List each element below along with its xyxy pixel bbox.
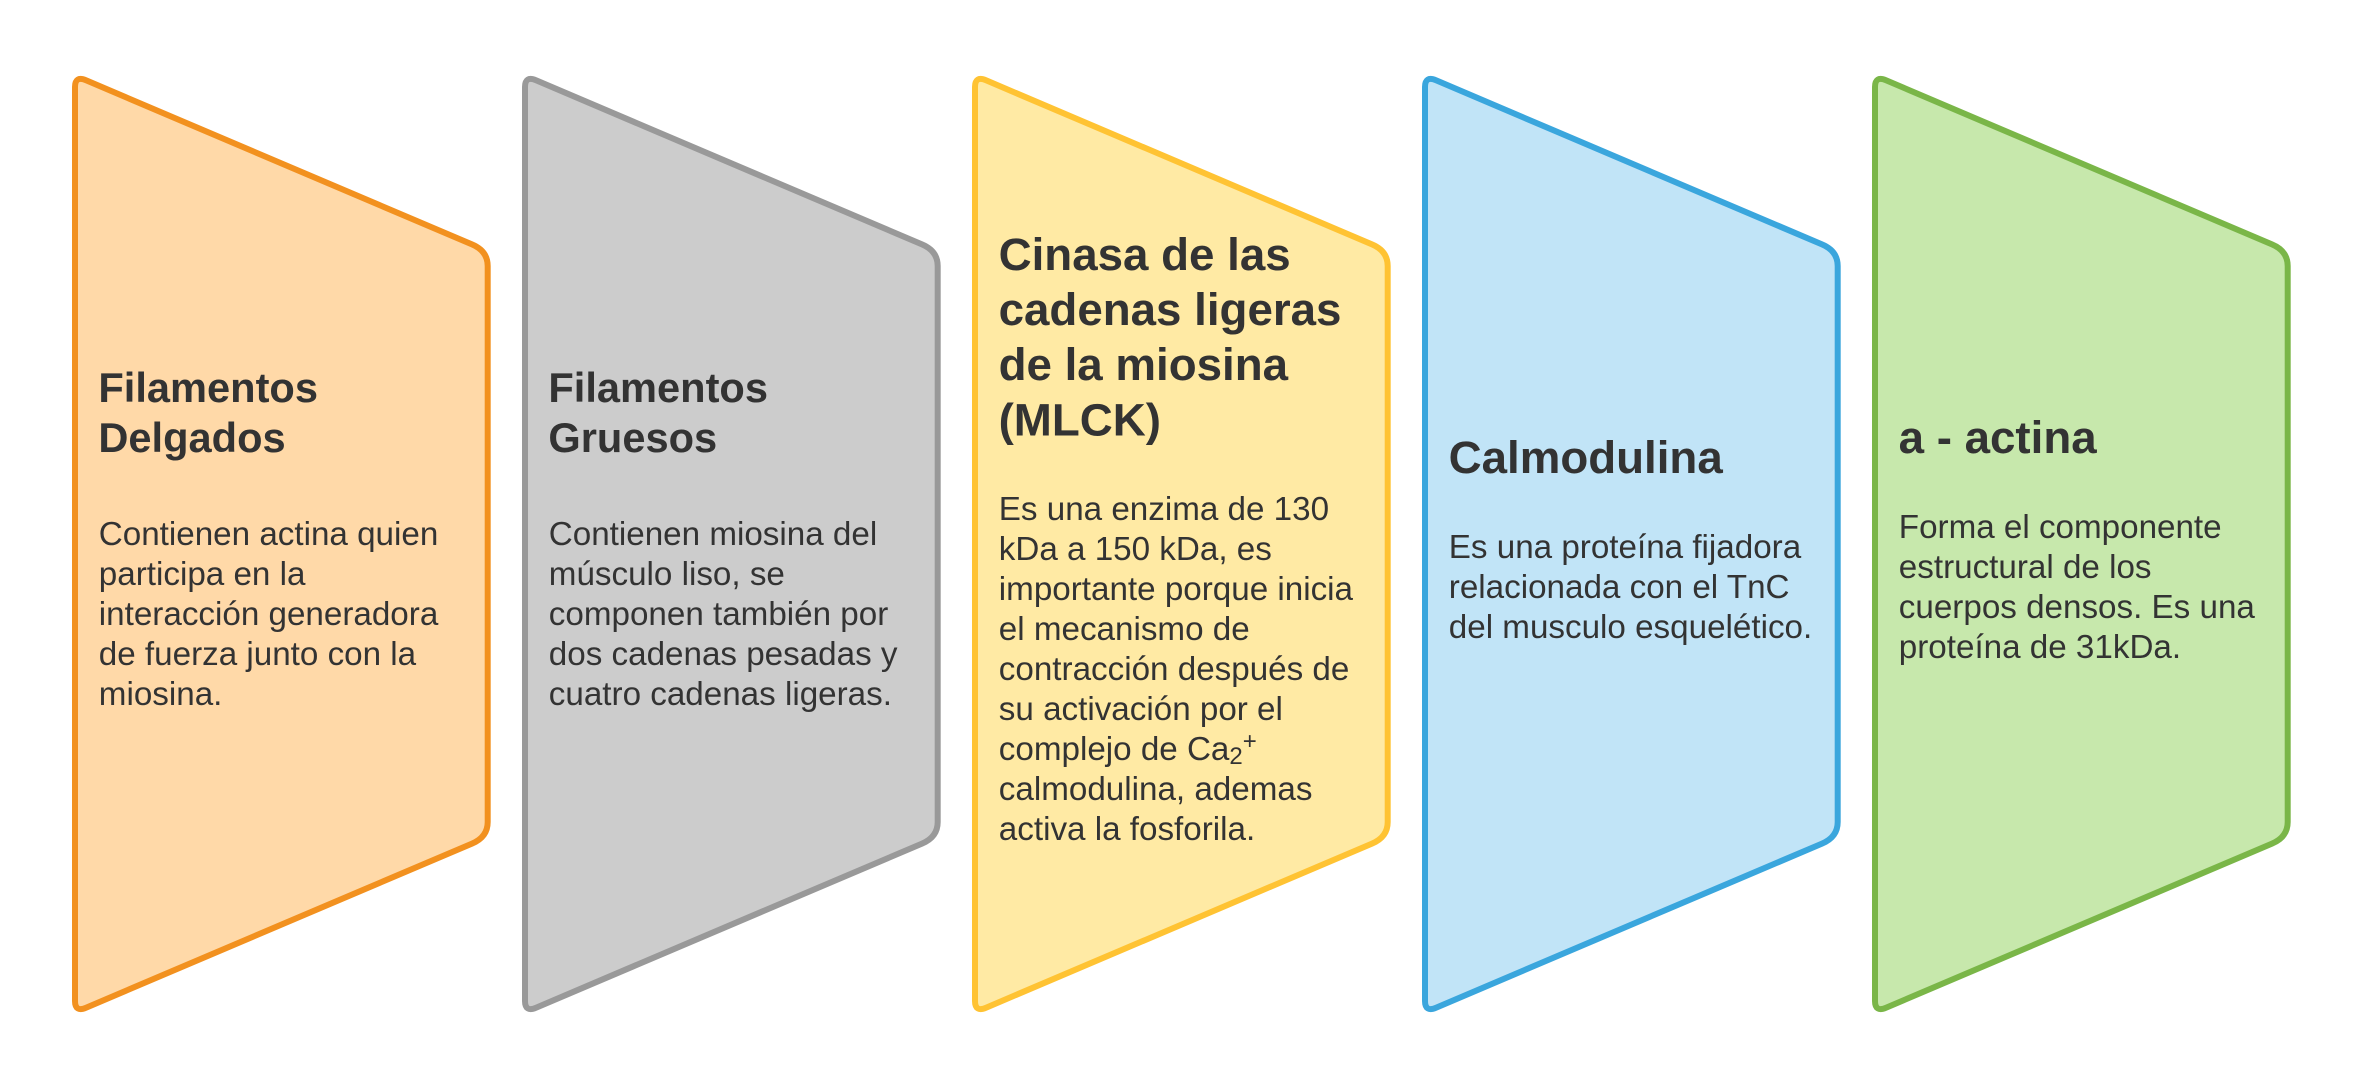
heading: Filamentos Delgados: Filamentos: [98, 364, 318, 411]
text block: a-actina description: Forma el componente: [1899, 509, 2222, 546]
text block: Filamentos Gruesos description: Contienen miosina del: [549, 516, 877, 553]
heading: Cinasa de las cadenas ligeras de la miosina (MLCK): Cinasa de las: [999, 229, 1291, 280]
panel: Filamentos Gruesos: [525, 79, 938, 1009]
heading: Cinasa de las cadenas ligeras de la miosina (MLCK): [999, 229, 1341, 446]
panel: Calmodulina: [1425, 79, 1838, 1009]
panel shape: blue: [1425, 79, 1838, 1009]
text block: Calmodulina description: relacionada con el TnC: [1449, 569, 1790, 606]
heading: Cinasa de las cadenas ligeras de la miosina (MLCK): de la miosina: [999, 339, 1289, 390]
text block: MLCK description: +: [1243, 728, 1257, 755]
text block: a-actina description: [1899, 509, 2255, 666]
text block: MLCK description: su activación por el: [999, 691, 1283, 728]
text block: a-actina description: proteína de 31kDa.: [1899, 629, 2181, 666]
text block: Filamentos Gruesos description: componen también por: [549, 596, 888, 633]
heading: Cinasa de las cadenas ligeras de la miosina (MLCK): cadenas ligeras: [999, 284, 1341, 335]
heading: Filamentos Delgados: Delgados: [98, 414, 286, 461]
text block: MLCK description: complejo de Ca: [999, 731, 1229, 768]
panel: Cinasa de las cadenas ligeras de la miosina: [975, 79, 1388, 1009]
text block: Filamentos Gruesos description: dos cadenas pesadas y: [549, 636, 898, 673]
text block: MLCK description: 2: [1229, 743, 1243, 770]
text block: Calmodulina description: del musculo esquelético.: [1449, 609, 1812, 646]
panel shape: orange: [75, 79, 488, 1009]
heading: a - actina: a - actina: [1899, 412, 2097, 463]
text block: MLCK description: calmodulina, ademas: [999, 771, 1312, 808]
text block: Filamentos Delgados description: interacción generadora: [99, 596, 439, 633]
text block: Filamentos Gruesos description: músculo liso, se: [549, 556, 785, 593]
text block: Filamentos Delgados description: miosina.: [99, 676, 222, 713]
panel shape: green: [1875, 79, 2288, 1009]
text block: Calmodulina description: Es una proteína fijadora: [1449, 529, 1802, 566]
heading: Filamentos Gruesos: Filamentos: [548, 364, 768, 411]
panel shape: yellow: [975, 79, 1388, 1009]
text block: MLCK description: el mecanismo de: [999, 611, 1250, 648]
text block: Filamentos Delgados description: participa en la: [99, 556, 306, 593]
text block: MLCK description: [999, 491, 1354, 848]
text block: Filamentos Delgados description: Contienen actina quien: [99, 516, 438, 553]
heading: Calmodulina: Calmodulina: [1449, 432, 1723, 483]
text block: a-actina description: estructural de los: [1899, 549, 2152, 586]
heading: Cinasa de las cadenas ligeras de la miosina (MLCK): (MLCK): [999, 394, 1161, 446]
text block: MLCK description: Es una enzima de 130: [999, 491, 1329, 528]
text block: Filamentos Gruesos description: [549, 516, 898, 713]
text block: Filamentos Delgados description: de fuerza junto con la: [99, 636, 417, 673]
heading: Filamentos Gruesos: [548, 364, 768, 461]
text block: MLCK description: activa la fosforila.: [999, 811, 1255, 848]
text block: MLCK description: contracción después de: [999, 651, 1349, 688]
panel shape: grey: [525, 79, 938, 1009]
text block: Calmodulina description: [1449, 529, 1812, 646]
text block: MLCK description: importante porque inicia: [999, 571, 1354, 608]
panel: Filamentos Delgados: [75, 79, 488, 1009]
text block: a-actina description: cuerpos densos. Es una: [1899, 589, 2255, 626]
text block: Filamentos Delgados description: [99, 516, 439, 713]
heading: Filamentos Gruesos: Gruesos: [548, 414, 717, 461]
heading: Filamentos Delgados: [98, 364, 318, 461]
panel: a-actina: [1875, 79, 2288, 1009]
text block: Filamentos Gruesos description: cuatro cadenas ligeras.: [549, 676, 892, 713]
text block: MLCK description: kDa a 150 kDa, es: [999, 531, 1272, 568]
